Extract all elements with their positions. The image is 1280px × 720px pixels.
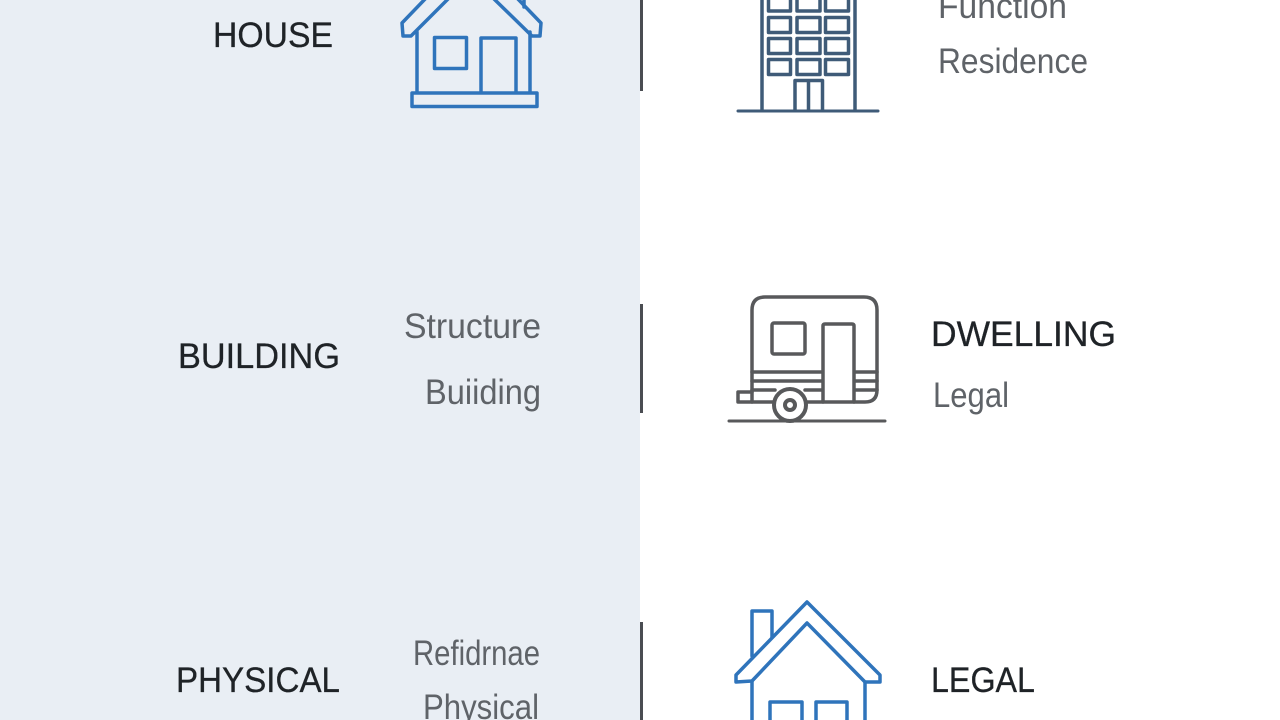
label: Building: Buiiding bbox=[425, 373, 541, 412]
label: Refidrnae: Refidrnae bbox=[413, 634, 540, 673]
divider segment: middle bbox=[640, 304, 643, 413]
icon: blue house with porch bbox=[402, 0, 541, 106]
icon: apartment building bbox=[738, 0, 878, 111]
heading: HOUSE: HOUSE bbox=[213, 16, 333, 55]
divider segment: bottom bbox=[640, 622, 643, 720]
heading: DWELLING: DWELLING bbox=[931, 315, 1116, 354]
label: Residence: Residence bbox=[938, 42, 1088, 81]
heading: LEGAL: LEGAL bbox=[931, 661, 1035, 700]
label: Legal: Legal bbox=[933, 376, 1009, 415]
panel: left background bbox=[0, 0, 640, 720]
icon: blue house with chimney bbox=[736, 602, 880, 720]
label: Structure: Structure bbox=[404, 307, 541, 346]
divider segment: top bbox=[640, 0, 643, 91]
icon: caravan bbox=[729, 297, 885, 421]
heading: BUILDING: BUILDING bbox=[178, 337, 340, 376]
heading: PHYSICAL: PHYSICAL bbox=[176, 661, 340, 700]
